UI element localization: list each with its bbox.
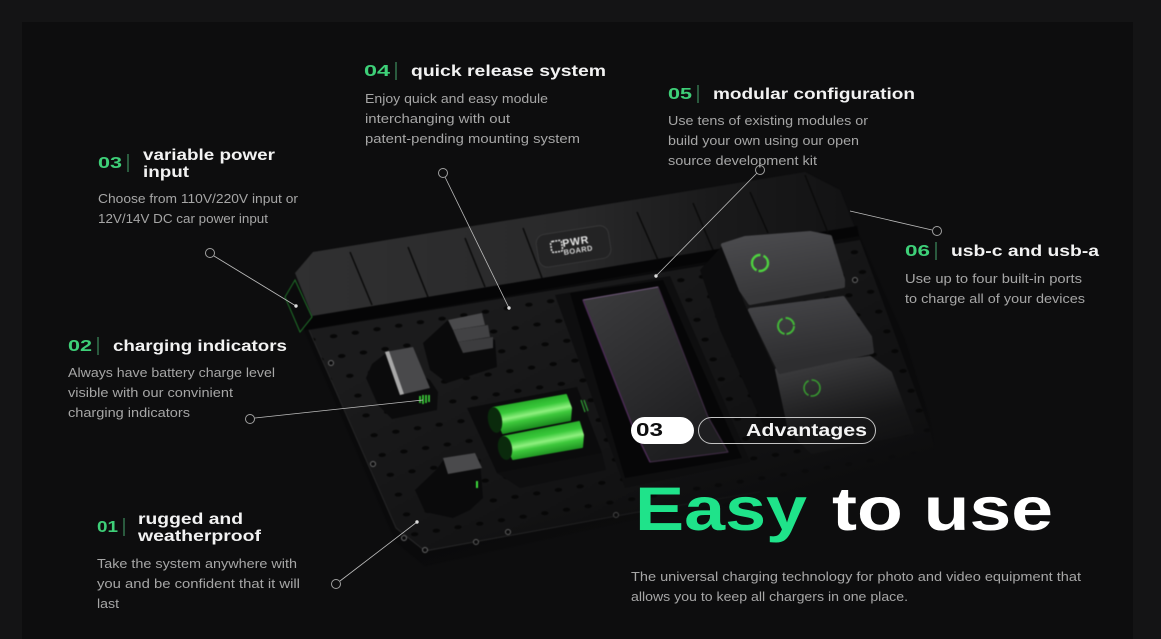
lower green cell xyxy=(496,422,583,461)
section number pill: 03 xyxy=(636,420,663,440)
charge ring 2 xyxy=(778,318,794,334)
marker line 04 xyxy=(438,168,511,310)
feature 05: modular configuration: build your own using our open xyxy=(668,133,859,148)
marker line 01 xyxy=(332,520,419,588)
marker line 05 xyxy=(654,166,764,278)
section label pill: Advantages xyxy=(746,420,867,440)
feature 04: quick release system: Enjoy quick and easy module xyxy=(365,91,548,106)
feature 02: charging indicators: charging indicators xyxy=(68,405,190,420)
feature 02: charging indicators: visible with our convinient xyxy=(68,385,233,400)
module: three gray batteries xyxy=(700,233,912,452)
feature 01: rugged and weatherproof: rugged and xyxy=(138,511,243,528)
section number pill xyxy=(631,417,694,444)
feature 06: usb-c and usb-a: 06 xyxy=(905,243,930,260)
feature 03: variable power input: variable power xyxy=(143,147,275,164)
title: to use xyxy=(832,475,1053,543)
feature 01: rugged and weatherproof: you and be confident that it will xyxy=(97,576,300,591)
device: charging board xyxy=(285,172,945,566)
feature 03: variable power input xyxy=(98,147,299,226)
feature 03: variable power input: 03 xyxy=(98,155,122,172)
feature 03: variable power input: input xyxy=(143,164,189,181)
feature 01: rugged and weatherproof: last xyxy=(97,596,119,611)
feature 04: quick release system: quick release system xyxy=(411,63,606,80)
description: allows you to keep all chargers in one place. xyxy=(631,589,908,604)
feature 04: quick release system: interchanging with out xyxy=(365,111,511,126)
feature 05: modular configuration: source development kit xyxy=(668,153,818,168)
marker line 03 xyxy=(206,248,298,308)
module: power bank xyxy=(555,276,750,488)
charge ring 3 xyxy=(804,380,820,396)
feature 03: variable power input: Choose from 110V/220V input or xyxy=(98,191,299,206)
feature 06: usb-c and usb-a: to charge all of your devices xyxy=(905,291,1085,306)
feature 04: quick release system: patent-pending mounting system xyxy=(365,131,580,146)
feature 01: rugged and weatherproof: Take the system anywhere with xyxy=(97,556,297,571)
feature 02: charging indicators: charging indicators xyxy=(113,338,287,355)
title xyxy=(635,475,1053,543)
module: small gray top battery charger xyxy=(366,347,438,419)
logo badge xyxy=(535,224,612,268)
marker line 06 xyxy=(850,211,942,236)
feature 05: modular configuration: Use tens of existing modules or xyxy=(668,113,869,128)
module: green battery cells tray xyxy=(467,387,606,488)
feature 06: usb-c and usb-a: usb-c and usb-a xyxy=(951,243,1099,260)
feature 05: modular configuration xyxy=(668,85,915,168)
board base with perforated plate xyxy=(298,226,945,566)
callout lines and markers xyxy=(206,166,942,588)
feature 05: modular configuration: modular configuration xyxy=(713,86,915,103)
description: The universal charging technology for photo and video equipment that xyxy=(631,569,1081,584)
top rail xyxy=(285,172,859,332)
feature 01: rugged and weatherproof: 01 xyxy=(97,519,118,536)
charge ring 1 xyxy=(752,255,768,271)
green power input port xyxy=(285,280,312,332)
module: stacked slab charger xyxy=(423,313,497,383)
feature 06: usb-c and usb-a: Use up to four built-in ports xyxy=(905,271,1082,286)
section label pill xyxy=(698,418,876,444)
description xyxy=(631,569,1081,604)
upper green cell xyxy=(486,395,571,434)
module: small charger with gray cap xyxy=(415,453,483,518)
feature 02: charging indicators: 02 xyxy=(68,338,92,355)
title: Easy xyxy=(635,475,807,543)
feature 04: quick release system: 04 xyxy=(364,63,390,80)
feature 03: variable power input: 12V/14V DC car power input xyxy=(98,211,268,226)
logo badge: PWR xyxy=(562,234,590,250)
feature 04: quick release system xyxy=(364,62,606,146)
logo badge: BOARD xyxy=(563,243,594,257)
feature 02: charging indicators xyxy=(68,337,287,420)
lower right fade xyxy=(380,380,1080,600)
feature 01: rugged and weatherproof: weatherproof xyxy=(137,528,262,545)
feature 05: modular configuration: 05 xyxy=(668,86,692,103)
green level indicator xyxy=(420,395,429,404)
marker line 02 xyxy=(246,400,423,424)
feature 01: rugged and weatherproof xyxy=(97,511,300,611)
feature 06: usb-c and usb-a xyxy=(905,242,1099,306)
feature 02: charging indicators: Always have battery charge level xyxy=(68,365,275,380)
